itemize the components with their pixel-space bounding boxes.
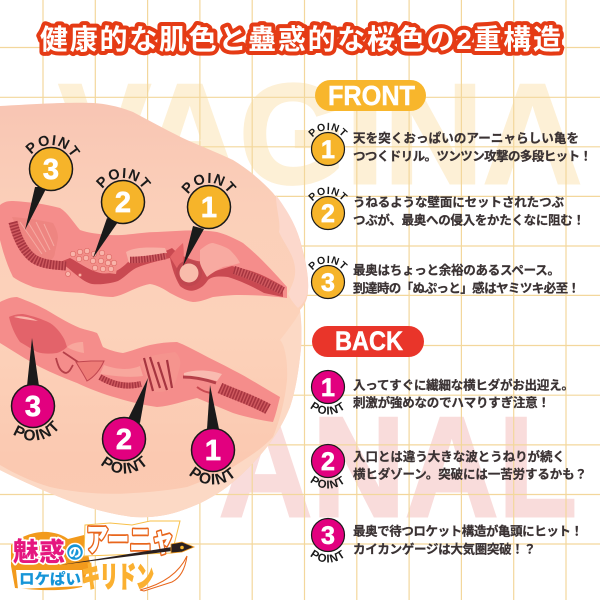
pin: back point 3 [10, 338, 58, 440]
back slot: light band [100, 365, 143, 377]
pin: back point 2 [100, 378, 148, 474]
badge [308, 122, 348, 166]
front slot: light ribbed section [126, 247, 167, 263]
back slot: large ribs [140, 352, 180, 392]
pin: back point 2: 2 [116, 424, 132, 456]
back slot: chamber highlight [14, 316, 38, 321]
badge: POINT [308, 186, 348, 201]
pin: back point 1: 1 [205, 435, 221, 467]
front slot [0, 201, 287, 302]
badge: 2 [321, 448, 335, 476]
right edge tissue highlight [276, 195, 308, 308]
logo: lower swoosh [140, 556, 187, 591]
title: 健康的な肌色と蠱惑的な桜色の2重構造 [40, 24, 561, 55]
pin: front point 1: POINT [181, 172, 237, 194]
description: つつくドリル。ツンツン攻撃の多段ヒット！ [353, 148, 592, 164]
pin: back point 3: POINT [13, 420, 58, 440]
description [353, 196, 585, 228]
front slot: ridge peak [200, 243, 240, 277]
description: 最奥はちょっと余裕のあるスペース。 [353, 262, 560, 278]
heading pill: BACK: BACK [335, 326, 403, 356]
front slot: ridge fan 3 [12, 217, 58, 262]
badge: POINT [310, 550, 344, 562]
badge: 1 [321, 374, 335, 402]
badge: POINT [308, 122, 348, 137]
badge [310, 370, 346, 414]
back slot: ragged end [220, 388, 268, 409]
description: 刺激が強めなのでハマりすぎ注意！ [353, 395, 550, 410]
back slot: neck slit and loop [56, 352, 78, 373]
pin: front point 1 [181, 172, 237, 266]
logo: pencil [60, 542, 194, 565]
pin: back point 3: 3 [25, 391, 41, 423]
badge [310, 518, 346, 562]
pin: back point 2: POINT [100, 455, 146, 474]
heading pill: BACK [312, 326, 424, 357]
description: 天を突くおっぱいのアーニャらしい亀を [353, 130, 579, 146]
badge: POINT [310, 402, 344, 414]
back item 3 [310, 518, 583, 562]
background word: VAGINA: VAGINA [59, 55, 582, 214]
badge: 1 [321, 136, 335, 164]
badge [308, 256, 348, 300]
description [353, 449, 587, 482]
logo: キリドン: キリドン [82, 562, 154, 594]
pin: front point 2: 2 [115, 187, 131, 219]
pin: front point 3: 3 [43, 154, 59, 186]
back slot: wedge [76, 361, 104, 381]
pin: back point 1: POINT [189, 466, 234, 485]
badge: POINT [310, 476, 344, 488]
logo: の [66, 544, 84, 560]
description [353, 130, 592, 164]
description [353, 524, 583, 556]
description: 最奥で待つロケット構造が亀頭にヒット！ [353, 524, 583, 538]
pin: front point 3 [25, 135, 80, 230]
badge: 3 [321, 522, 335, 550]
pin: front point 3: POINT [25, 135, 80, 155]
logo [11, 521, 194, 594]
front slot: ribs [130, 256, 166, 260]
front slot: dark channel [60, 248, 283, 297]
description [353, 262, 580, 296]
description: 横ヒダゾーン。突破には一苦労するかも？ [353, 466, 587, 482]
back slot: smooth section [184, 370, 222, 381]
back slot: cone chamber [9, 314, 67, 354]
illustration: cross-section body [0, 103, 308, 517]
description: つぶが、最奥への侵入をかたくなに阻む！ [353, 212, 585, 228]
description: 入口とは違う大きな波とうねりが続く [353, 449, 565, 464]
description: カイカンゲージは大気圏突破！？ [353, 542, 536, 556]
front item 3 [308, 256, 580, 300]
logo: top outline panel [84, 521, 180, 556]
heading pill: FRONT: FRONT [328, 80, 415, 111]
back slot: ribbed channel [100, 377, 141, 386]
logo: 魅惑: 魅惑 [13, 537, 65, 567]
badge: 3 [321, 269, 335, 297]
front slot: round bulge [176, 260, 202, 286]
back item 1 [310, 370, 574, 414]
front slot: ribbed end [234, 270, 283, 291]
front item 1 [308, 122, 592, 166]
front item 2 [308, 186, 585, 230]
description: 入ってすぐに繊細な横ヒダがお出迎え。 [353, 378, 574, 392]
pin: front point 2 [93, 168, 152, 258]
description [353, 378, 574, 410]
pin: front point 2: POINT [96, 168, 152, 188]
front slot: ridge at left of bulge [170, 243, 184, 270]
logo: の: の [68, 545, 82, 560]
back slot [0, 297, 280, 422]
logo: アーニャ: アーニャ [86, 523, 174, 558]
logo: ロケぱい: ロケぱい [19, 571, 81, 588]
lower lobe light rim [0, 312, 302, 517]
description: 到達時の「ぬぷっと」感はヤミツキ必至！ [353, 280, 580, 296]
back item 2 [310, 444, 587, 488]
pin: front point 1: 1 [201, 192, 217, 224]
badge [308, 186, 348, 230]
back slot: light above neck [67, 342, 84, 353]
badge [310, 444, 346, 488]
logo: orange backing [11, 532, 90, 590]
front slot: dark ribbed zone 3 [13, 222, 66, 266]
pin: back point 1 [189, 385, 236, 485]
description: うねるような壁面にセットされたつぶ [353, 196, 564, 210]
badge: 2 [321, 200, 335, 228]
badge: POINT [308, 256, 348, 270]
front slot: bumps [66, 248, 118, 277]
